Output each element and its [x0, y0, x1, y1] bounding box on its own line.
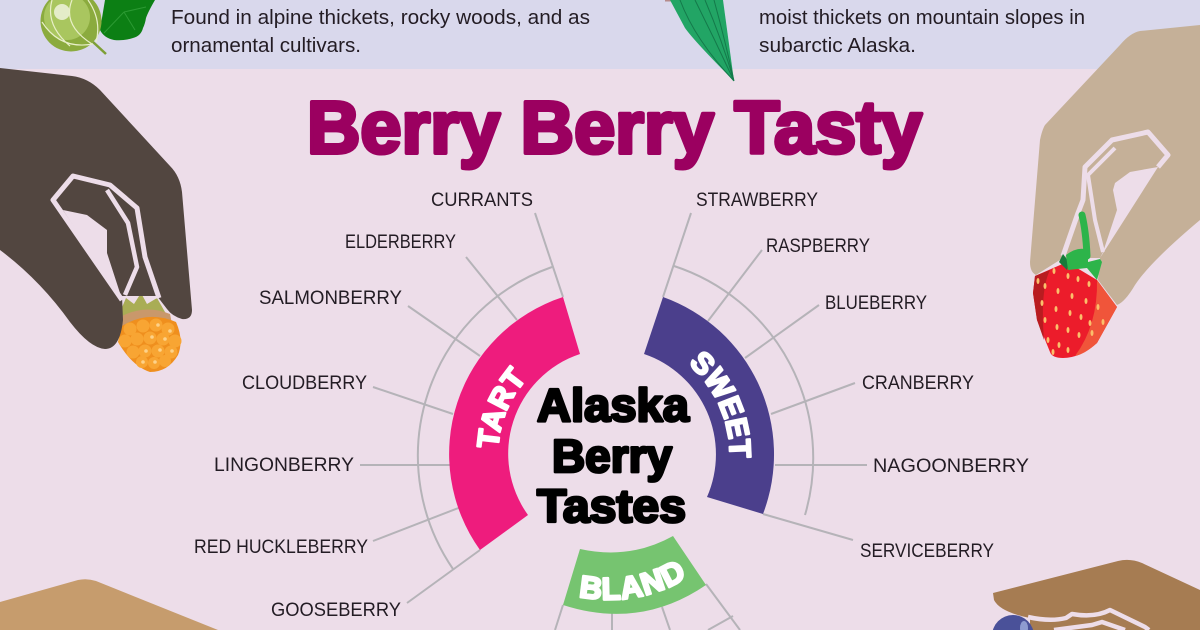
- text: subarctic description: [759, 7, 1085, 57]
- illustration: dark hand holding cloudberry: [0, 68, 192, 372]
- segment: tart: TART: [476, 364, 524, 448]
- text: alpine thickets description: ornamental cultivars.: [171, 35, 361, 57]
- top info band: [0, 0, 1200, 81]
- labels: sweet berries: [696, 189, 1029, 562]
- chart: berry taste radial diagram: [194, 189, 1029, 630]
- labels: tart berries: GOOSEBERRY: [271, 599, 401, 621]
- labels: sweet berries: NAGOONBERRY: [873, 455, 1029, 477]
- labels: sweet berries: BLUEBERRY: [825, 292, 927, 314]
- icon: cloudberry: [118, 293, 182, 372]
- icon: gooseberry with leaf: [40, 0, 155, 54]
- labels: sweet berries: CRANBERRY: [862, 372, 974, 394]
- labels: tart berries: [194, 189, 533, 621]
- labels: tart berries: CURRANTS: [431, 189, 533, 211]
- leader lines: tart berries: [360, 213, 563, 603]
- leader lines: sweet berries: [663, 213, 867, 540]
- leader lines: bland berries: [555, 584, 740, 630]
- text: alpine thickets description: [171, 7, 590, 57]
- center heading: Alaska: [537, 379, 689, 431]
- illustration: bottom left hand: [0, 579, 218, 630]
- title: Berry Berry Tasty: [307, 86, 922, 169]
- icon: strawberry calyx: [1059, 215, 1102, 280]
- labels: sweet berries: RASPBERRY: [766, 235, 870, 257]
- center heading: [537, 379, 689, 532]
- text: subarctic description: subarctic Alaska.: [759, 35, 916, 57]
- labels: sweet berries: STRAWBERRY: [696, 189, 818, 211]
- labels: sweet berries: SERVICEBERRY: [860, 540, 994, 562]
- text: subarctic description: moist thickets on mountain slopes in: [759, 7, 1085, 29]
- center heading: Berry: [552, 430, 672, 482]
- segment: sweet: [644, 297, 774, 514]
- labels: tart berries: RED HUCKLEBERRY: [194, 536, 368, 558]
- icon: blueberry: [992, 615, 1034, 630]
- segment: bland: BLAND: [579, 562, 684, 601]
- segment: sweet: SWEET: [690, 351, 752, 458]
- icon: green leaf tip: [665, 0, 734, 81]
- labels: tart berries: CLOUDBERRY: [242, 372, 367, 394]
- illustration: bottom right hand with blueberry: [992, 560, 1200, 630]
- illustration: tan hand holding strawberry: [1030, 25, 1200, 358]
- text: alpine thickets description: Found in alpine thickets, rocky woods, and as: [171, 7, 590, 29]
- segment: bland: [563, 536, 706, 614]
- labels: tart berries: ELDERBERRY: [345, 231, 456, 253]
- center heading: Tastes: [537, 480, 686, 532]
- segment: tart: [449, 297, 580, 550]
- icon: strawberry body: [1033, 262, 1117, 358]
- labels: tart berries: SALMONBERRY: [259, 287, 402, 309]
- labels: tart berries: LINGONBERRY: [214, 454, 354, 476]
